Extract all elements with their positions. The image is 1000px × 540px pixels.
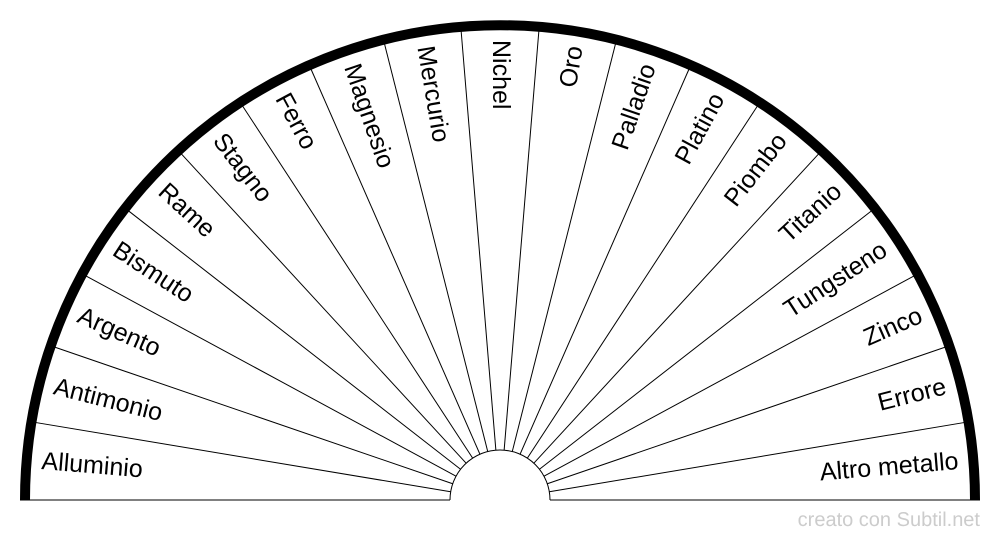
label: Titanio: Titanio	[774, 177, 847, 248]
inner arc	[450, 450, 550, 500]
label: Rame: Rame	[153, 177, 221, 243]
label: Ferro: Ferro	[270, 88, 323, 154]
label: Palladio: Palladio	[606, 60, 662, 153]
label: Argento: Argento	[74, 301, 165, 362]
label: Altro metallo: Altro metallo	[819, 447, 960, 486]
label: Magnesio: Magnesio	[338, 60, 400, 172]
label: Platino: Platino	[669, 88, 730, 169]
label: Antimonio: Antimonio	[51, 373, 166, 427]
label: Alluminio: Alluminio	[40, 447, 144, 483]
label: Tungsteno: Tungsteno	[779, 236, 892, 323]
label: Oro: Oro	[554, 44, 589, 90]
label: Errore: Errore	[875, 373, 949, 417]
label: Bismuto: Bismuto	[108, 236, 199, 309]
label: Zinco: Zinco	[859, 301, 926, 352]
watermark credit: creato con Subtil.net	[798, 509, 980, 531]
label: Piombo: Piombo	[719, 128, 793, 212]
label: Nichel: Nichel	[487, 40, 515, 109]
label: Stagno: Stagno	[207, 128, 278, 208]
baseline	[20, 499, 980, 501]
label: Mercurio: Mercurio	[411, 44, 455, 144]
